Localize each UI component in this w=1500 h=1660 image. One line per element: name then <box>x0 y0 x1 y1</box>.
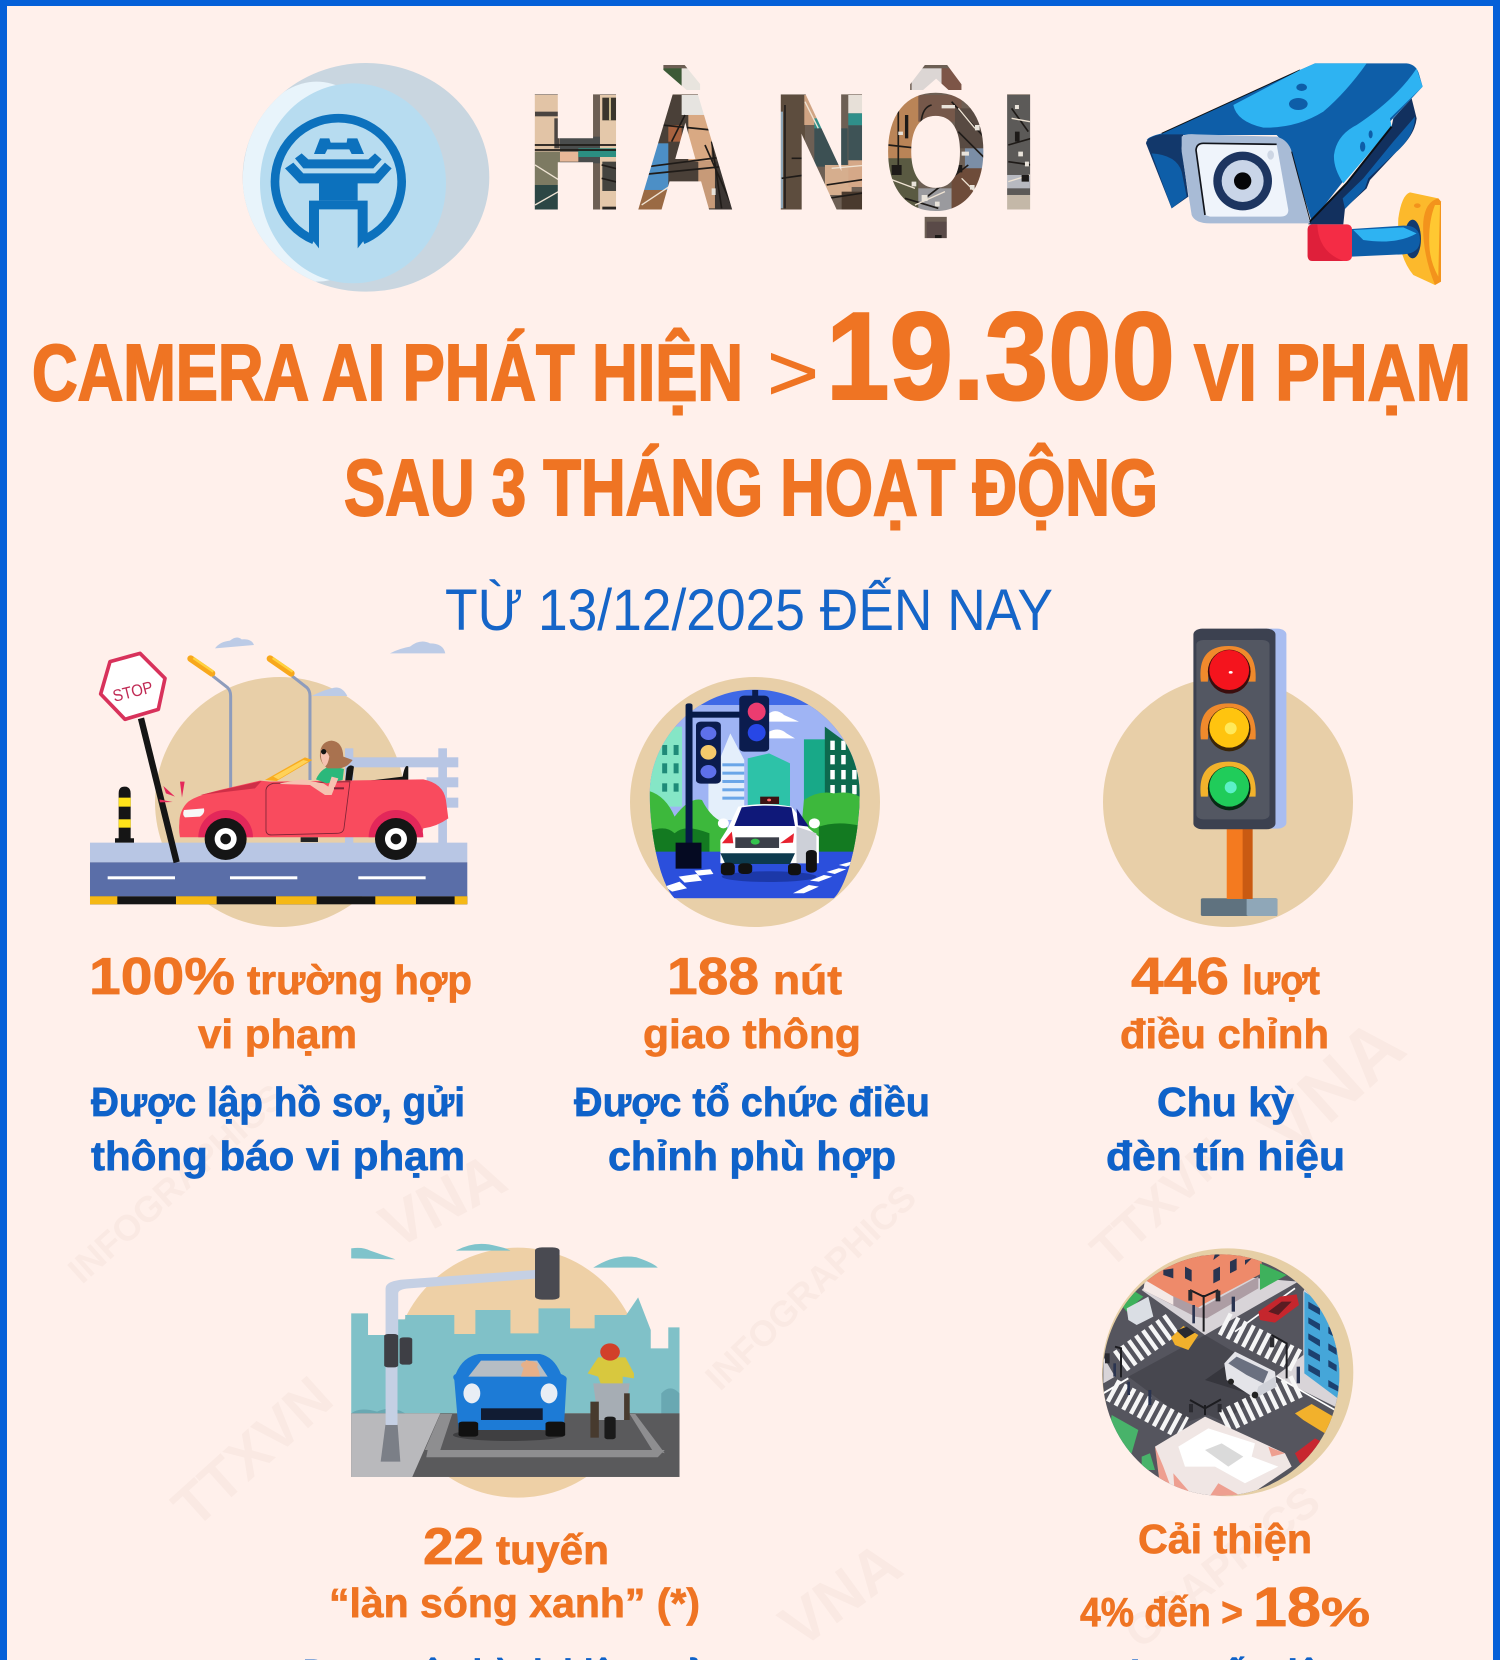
illustration: car and motorbike at signal <box>351 1244 680 1498</box>
heading: main title line 1: 19.300 <box>826 288 1175 426</box>
text: stat 446 adjustments: lượt <box>1242 957 1320 1003</box>
text: stat 188 intersections <box>574 948 930 1179</box>
text: stat 22 green wave routes <box>303 1518 704 1660</box>
illustration: white car in city <box>630 677 880 927</box>
icon: Hanoi emblem <box>243 63 489 292</box>
watermark: VNA <box>768 1529 914 1660</box>
icon: security camera <box>1146 63 1441 285</box>
text: stat 446 adjustments <box>1106 948 1345 1179</box>
text: stat 188 intersections: chỉnh phù hợp <box>608 1133 896 1179</box>
text: stat 100% violations: 100% <box>89 948 235 1006</box>
text: stat 188 intersections: 188 <box>667 948 759 1006</box>
text: stat speed improvement <box>1080 1516 1370 1660</box>
text: stat speed improvement: 18 <box>1253 1575 1321 1638</box>
text: stat 100% violations: vi phạm <box>198 1011 357 1057</box>
text: stat 100% violations: thông báo vi phạm <box>91 1133 465 1179</box>
subtitle: date range: TỪ 13/12/2025 ĐẾN NAY <box>445 578 1053 643</box>
text: stat 446 adjustments: đèn tín hiệu <box>1106 1133 1345 1179</box>
text: stat 446 adjustments: Chu kỳ <box>1157 1079 1294 1125</box>
text: stat 446 adjustments: 446 <box>1131 948 1229 1006</box>
text: stat 446 adjustments: điều chỉnh <box>1120 1011 1329 1057</box>
watermark: GRAPHICS <box>1116 1476 1329 1658</box>
illustration: isometric intersection <box>1095 1248 1355 1503</box>
text: stat 100% violations: trường hợp <box>247 957 472 1003</box>
text: stat 188 intersections: nút <box>773 957 842 1003</box>
text: stat speed improvement: Cải thiện <box>1138 1516 1312 1562</box>
heading: main title line 1: > <box>767 328 819 417</box>
watermark <box>60 1002 1421 1660</box>
heading: main title line 1 <box>32 288 1471 426</box>
text: stat 100% violations: Được lập hồ sơ, gửi <box>91 1079 465 1125</box>
text: stat 22 green wave routes: 22 <box>423 1518 484 1576</box>
heading: HÀ NỘI photo-filled letters: HÀ NỘI <box>528 63 1037 242</box>
watermark: INFOGRAPHICS <box>60 1076 292 1291</box>
text: stat speed improvement: 4% đến > <box>1080 1589 1243 1635</box>
watermark: TTXVN <box>160 1364 345 1540</box>
text: stat speed improvement: % <box>1321 1589 1370 1635</box>
watermark: VNA <box>1244 1002 1421 1173</box>
text: stat 188 intersections: Được tổ chức điều <box>574 1079 930 1125</box>
text: stat 188 intersections: giao thông <box>643 1011 861 1057</box>
illustration: traffic light <box>1103 629 1353 927</box>
text: stat 100% violations <box>89 948 472 1179</box>
illustration: car hitting stop sign <box>90 637 467 927</box>
watermark: TTXVN <box>1080 1127 1239 1278</box>
illustration: car hitting stop sign: STOP <box>111 678 155 706</box>
heading: main title line 2: SAU 3 THÁNG HOẠT ĐỘNG <box>344 443 1158 532</box>
text: stat 22 green wave routes: “làn sóng xanh” (*) <box>329 1580 700 1626</box>
watermark: INFOGRAPHICS <box>697 1177 924 1398</box>
heading: main title line 1: CAMERA AI PHÁT HIỆN <box>32 328 743 417</box>
watermark: VNA <box>369 1140 517 1262</box>
text: stat 22 green wave routes: tuyến <box>496 1527 609 1573</box>
